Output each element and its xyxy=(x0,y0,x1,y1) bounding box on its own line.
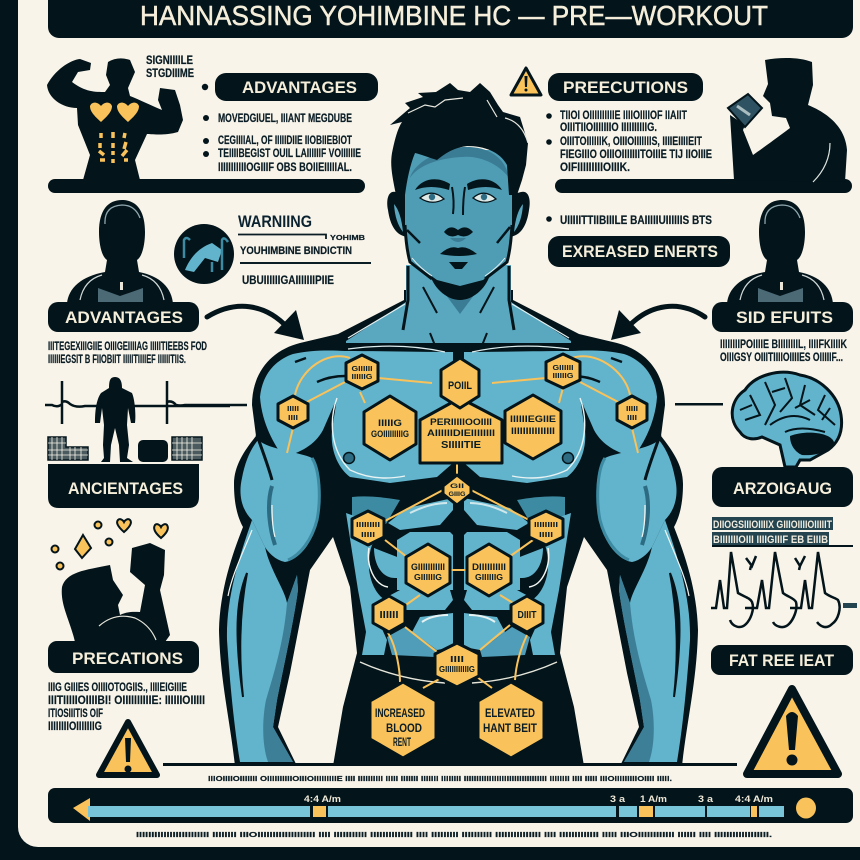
timeline bar: 1 A/m xyxy=(640,794,667,804)
hexagon: far right: IIII xyxy=(627,415,637,422)
hexagon: far left: IIIII xyxy=(287,406,299,413)
brows xyxy=(415,179,502,190)
hexagon: right rib xyxy=(529,511,563,545)
arrow: right to chest xyxy=(611,306,705,340)
panel: bust silhouette left xyxy=(67,200,173,304)
hexagon: left rib: IIIIIIIII xyxy=(356,522,380,529)
chart: heartbeat with lifter xyxy=(45,377,247,462)
icon: warning triangle small xyxy=(511,68,541,95)
panel: advantages second xyxy=(48,302,207,366)
hexagon: central pentagon: PERIIIIIOOIIII xyxy=(430,417,492,427)
panel: fat ree ieat xyxy=(711,645,853,675)
caption above timeline: IIIOIIIIOIIIIIII OIIIIIIIIIIOIIIOIIIIIIIIIE IIII IIIIIIIIII IIIII IIIIIII IIIIIII IIIIIIII IIIIIIIIIIIIIIIIIIIIIIIIIIIIIIIII IIIIIIII IIII IIIII IIIOIIIIIIIIIOIIII IIIII. xyxy=(208,774,672,783)
hexagon: elevated heart beat: ELEVATED xyxy=(485,706,535,720)
hexagon: elevated heart beat xyxy=(478,682,544,758)
hair xyxy=(390,83,528,195)
hexagon: right abs xyxy=(467,544,511,596)
nose xyxy=(452,187,465,215)
eyes xyxy=(420,193,496,202)
panel: warning block: UBUIIIIIIGAIIIIIIIPIIE xyxy=(242,275,334,287)
panel: precations label and text xyxy=(48,641,205,733)
hexagon: central pentagon: SIIIIITIE xyxy=(441,440,481,451)
panel: precautions list: OIIITOIIIIIIK, OIIIOIIIIIIIS, IIIIEIIIIEIT xyxy=(560,136,702,148)
timeline bar: 3 a xyxy=(698,794,714,804)
panel: extreased enerts: EXREASED ENERTS xyxy=(562,243,718,261)
hexagon: central pentagon xyxy=(420,398,502,463)
hexagon: left chest xyxy=(364,396,416,460)
title banner xyxy=(48,0,853,38)
hexagon: waist xyxy=(435,643,479,687)
icon: warning triangle left xyxy=(99,722,157,775)
panel: side effects: SID EFUITS xyxy=(736,309,833,327)
hexagon: waist: GIIIIIIIIIIIG xyxy=(439,665,475,674)
title banner: HANNASSING YOHIMBINE HC — PRE—WORKOUT xyxy=(140,0,768,31)
hexagon: increased blood rate xyxy=(370,682,436,758)
panel: arzoigaug: DIIOGSIIIOIIIIX GIIIOIIIIOIIIIIT xyxy=(713,519,832,531)
panel: precautions list: OIIITIIOIIIIIIIO IIIIIIIIIIG. xyxy=(560,122,657,134)
hexagon: far left: IIII xyxy=(288,415,298,422)
hexagon: right abs: DIIIIIIIIII xyxy=(472,562,506,572)
hexagon: right rib: IIIIIIIII xyxy=(534,522,558,529)
panel: ancientages label: ANCIENTAGES xyxy=(68,480,183,498)
panel: advantages second: ADVANTAGES xyxy=(65,309,183,327)
panel: extreased enerts xyxy=(546,215,730,267)
panel: precations label and text: ITIOSIIITIS OIF xyxy=(48,708,103,720)
hexagon: right rib: IIIII xyxy=(539,532,553,539)
hexagon: lower left xyxy=(373,596,405,632)
panel: ancientages label xyxy=(48,464,199,508)
mouth xyxy=(440,247,477,269)
hexagon: lower right xyxy=(511,596,543,632)
panel: advantages list top: MOVEDGIUEL, IIIANT MEGDUBE xyxy=(218,113,352,125)
chart: heart rate trace xyxy=(711,552,857,627)
panel: precations label and text: PRECATIONS xyxy=(72,650,183,668)
panel: advantages second: IIIIIIEGSIT B FIIOBIIT IIIIITIIIIEF IIIIIITIIS. xyxy=(48,354,186,366)
hexagon: far right: IIIII xyxy=(626,406,638,413)
hexagon: increased blood rate: INCREASED xyxy=(375,706,425,720)
hexagon: sternum: GII xyxy=(450,484,465,490)
icon: brain xyxy=(675,372,842,467)
panel: warning block xyxy=(174,212,371,287)
hexagon: right chest: IIIIIIIIIIIIIII xyxy=(511,426,555,436)
hexagon: right chest: IIIIIIEGIIE xyxy=(510,414,556,424)
panel: advantages list top xyxy=(202,73,378,174)
panel: arzoigaug xyxy=(712,467,853,547)
panel: side effects xyxy=(712,302,853,364)
hexagon: lower right: DIIIT xyxy=(518,610,536,621)
panel: precautions list: FIEGIIIO OIIIOIIIIIIITOIIIE TIJ IIOIIIE xyxy=(560,149,712,161)
panel: flexing silhouette with hearts xyxy=(47,55,365,193)
caption below timeline: IIIIIIIIIIIIIIIIIIIIIIII IIIIIIII IIIOIIIIIIIIIIIIIIIIIII IIII IIIIIIIIIII IIIIIIIIIIIIII IIII IIIIIIIII IIIIIIIIII IIIIIIIIIIIIIII IIII IIIIIIIIIIIII IIIII IIIOIIIIIIIIIIII IIIIII IIII IIIIIIIIIIIIIIIIII. xyxy=(136,830,772,839)
panel: bust silhouette right xyxy=(727,200,833,304)
jaw and beard xyxy=(430,275,490,300)
hexagon: upper right xyxy=(546,354,580,388)
hexagon: sternum xyxy=(443,475,471,505)
panel: precautions list: OIFIIIIIIIIIOIIIK. xyxy=(560,162,630,174)
hexagon: left chest: GOIIIIIIIIIG xyxy=(371,429,409,439)
connector lines xyxy=(287,356,638,688)
timeline bar: 4:4 A/m xyxy=(304,794,341,804)
timeline bar: 3 a xyxy=(610,794,626,804)
panel: fat ree ieat: FAT REE IEAT xyxy=(729,652,834,670)
hexagon: left abs: GIIIIIIIIIII xyxy=(411,562,445,572)
hexagon: increased blood rate: RENT xyxy=(393,735,411,749)
hexagon: upper left xyxy=(346,355,378,389)
figure: muscular torso xyxy=(219,265,698,766)
hexagon: right abs: GIIIIIIG xyxy=(475,573,503,582)
hexagon: left chest: IIIIIG xyxy=(378,418,402,428)
hexagon: right chest xyxy=(505,395,561,459)
panel: arzoigaug: ARZOIGAUG xyxy=(733,480,832,498)
decorative base line xyxy=(163,763,737,766)
hexagon: upper left: GIIIIII xyxy=(352,366,373,373)
panel: warning block: WARNIING xyxy=(238,212,312,231)
panel: precations label and text: IIIIIIIIOIIIIIIIG xyxy=(48,721,102,733)
panel: precautions list: PREECUTIONS xyxy=(563,79,688,97)
panel: advantages list top: IIIIIIIIIIIOGIIIF OBS BOIIEIIIIIAL. xyxy=(218,162,352,174)
hexagon: left abs xyxy=(406,544,450,596)
hexagon: elevated heart beat: HANT BEIT xyxy=(483,721,538,735)
panel: precautions list xyxy=(546,73,712,174)
panel: drinking man silhouette xyxy=(555,58,852,193)
hexagon: top centre: POIIL xyxy=(448,380,472,392)
hexagon: central pentagon: AIIIIIIDIEIIIIIIII xyxy=(427,428,495,438)
timeline bar: 4:4 A/m xyxy=(735,794,773,804)
panel: advantages second: IIITEGEXIIIGIIE OIIIGEIIIIAG IIIIITIEEBS FOD xyxy=(48,341,207,353)
panel: precations label and text: IIIG GIIIES OIIIIOTOGIIS., IIIIEIGIIIE xyxy=(48,682,187,694)
figure: head xyxy=(387,83,530,314)
hexagon: left rib xyxy=(352,511,384,545)
timeline bar xyxy=(48,788,853,823)
panel: precations label and text: IIITIIIIIOIIIIBI! OIIIIIIIIIIE: IIIIIIOIIIII xyxy=(48,695,205,707)
panel: warning block: YOUHIMBINE BINDICTIN xyxy=(240,245,352,257)
hexagon: far right xyxy=(617,396,647,428)
hexagon: lower left: IIIIII xyxy=(380,610,399,621)
hexagon: left rib: IIIII xyxy=(361,532,375,539)
hexagon: far left xyxy=(278,396,308,428)
icon: man with raised fist and sparks xyxy=(52,519,170,642)
panel: advantages list top: TEIIIIBEGIST OUIL LAIIIIIIF VOIIIIIIE xyxy=(218,148,361,160)
panel: flexing silhouette with hearts: SIGNIIIILE xyxy=(146,55,193,67)
panel: warning block: YOHIMB xyxy=(330,235,365,242)
hexagon nodes xyxy=(278,354,647,758)
hexagon: sternum: GIIIG xyxy=(448,492,466,498)
hexagon: upper right: GIIIIII xyxy=(552,365,574,372)
panel: extreased enerts: UIIIIITTIIBIIILE BAIIIIIUIIIIIIS BTS xyxy=(560,215,712,227)
icon: warning triangle large xyxy=(747,689,838,774)
panel: arzoigaug: BIIIIIIIOIII IIIIGIIIF EB EIIIB xyxy=(713,534,828,546)
panel: flexing silhouette with hearts: STGDIIIME xyxy=(146,68,194,80)
hexagon: waist: IIII xyxy=(450,655,464,664)
hexagon: left abs: GIIIIIIG xyxy=(414,573,442,582)
hexagon: increased blood rate: BLOOD xyxy=(386,721,422,735)
hexagon: top centre xyxy=(441,358,479,408)
panel: advantages list top: CEGIIIIAL, OF IIIIIDIIE IIOBIIEBIOT xyxy=(218,135,352,147)
hexagon: upper right: IIIIIIG xyxy=(552,373,574,380)
arrow: left to chest xyxy=(207,306,304,340)
hexagon: upper left: IIIIIIG xyxy=(352,374,373,381)
panel: advantages list top: ADVANTAGES xyxy=(242,79,357,97)
panel: precautions list: TIIOI OIIIIIIIIIIE IIIIOIIIIOF IIAIIT xyxy=(560,110,687,122)
